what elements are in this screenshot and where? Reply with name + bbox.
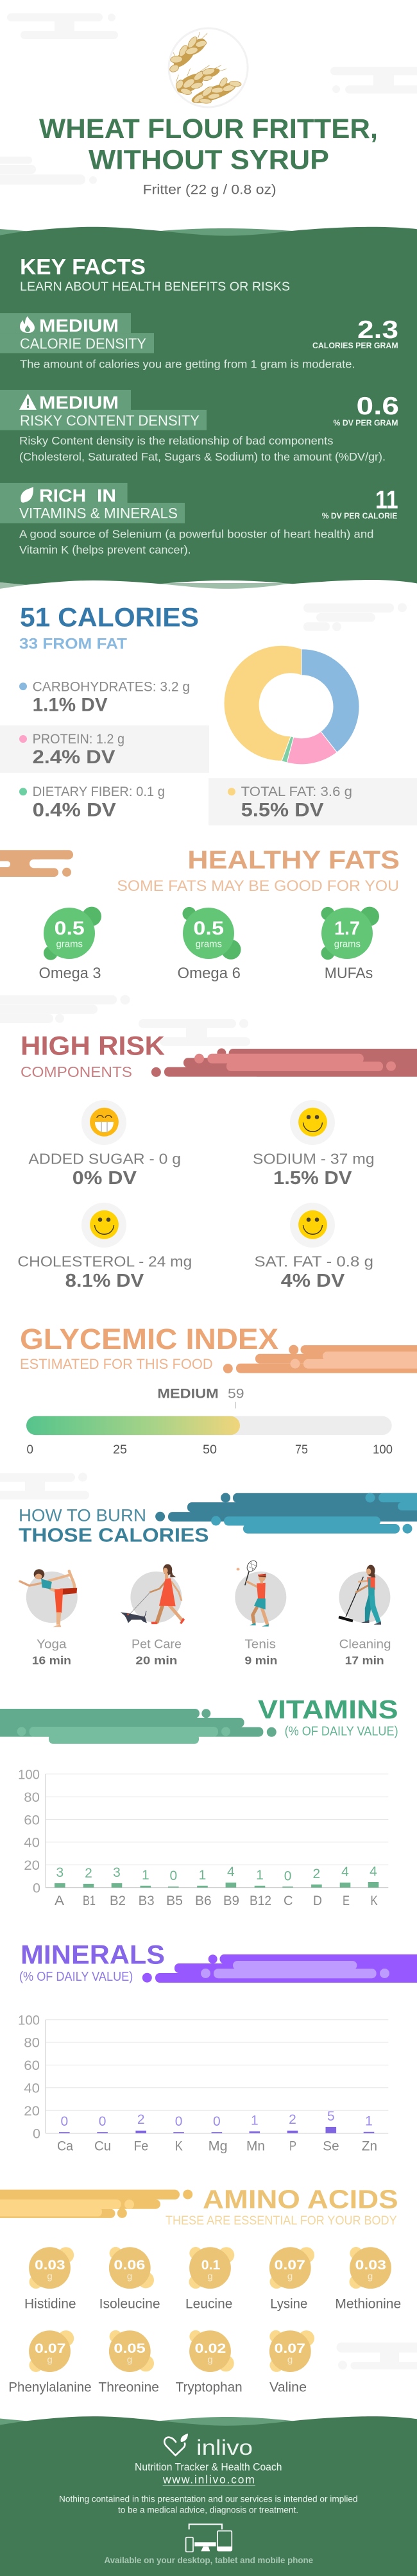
tagline: Nutrition Tracker & Health Coach (135, 2461, 282, 2473)
bar chart: minerals: Mn (246, 2139, 265, 2154)
icon: leaf (21, 487, 33, 503)
fact: vitamins and minerals: A good source of Selenium (a powerful booster of heart health) and (19, 528, 373, 541)
bar chart: minerals: 60 (24, 2058, 40, 2073)
subheading: (% OF DAILY VALUE) (285, 1725, 398, 1739)
donut chart (224, 645, 359, 765)
logo: wordmark: inlivo (196, 2436, 253, 2459)
panel: healthy fats (0, 846, 400, 982)
fact: calorie density: CALORIE DENSITY (20, 335, 146, 352)
disclaimer: Nothing contained in this presentation and our services is intended or implied (59, 2495, 358, 2504)
heading: glycemic index: GLYCEMIC INDEX (20, 1323, 278, 1355)
bar chart: minerals: 20 (24, 2104, 40, 2119)
legend: carbohydrates: CARBOHYDRATES: 3.2 g (33, 679, 190, 694)
legend: protein: PROTEIN: 1.2 g (33, 731, 124, 747)
stat: mufas (321, 907, 379, 982)
fact: risky content density: (Cholesterol, Saturated Fat, Sugars & Sodium) to the amount (%DV/gr). (19, 450, 386, 463)
bar chart: vitamins: 0 (284, 1869, 291, 1883)
stat: omega 6 (177, 907, 241, 982)
bar chart: minerals: 100 (18, 2013, 40, 2028)
bar chart: minerals: 0 (33, 2126, 40, 2141)
icon: devices (186, 2524, 232, 2552)
stat: mufas: 1.7 (334, 918, 360, 939)
fact: vitamins and minerals: 11 (375, 486, 398, 514)
heading: HOW TO BURN (19, 1505, 146, 1525)
bar chart: vitamins: 1 (199, 1868, 206, 1883)
activity: tennis (235, 1559, 286, 1627)
title: WITHOUT SYRUP (89, 144, 329, 175)
amino acid blobs, row 1: 0.03 (35, 2257, 65, 2273)
website link: www.inlivo.com (162, 2473, 255, 2486)
panel: minerals (18, 1939, 417, 2154)
amino acid blobs, row 1: 0.03 (355, 2257, 386, 2273)
legend: total fat (228, 784, 352, 821)
bar chart: vitamins: 0 (33, 1881, 40, 1895)
subheading: from fat: 33 FROM FAT (19, 635, 127, 653)
item: added sugar: ADDED SUGAR - 0 g (28, 1151, 181, 1167)
bar chart: vitamins: 1 (142, 1868, 149, 1883)
bar chart: vitamins: 3 (113, 1865, 121, 1880)
activity labels: Pet Care (132, 1638, 182, 1652)
amino acid blobs, row 2: 0.07 (275, 2341, 305, 2356)
bar chart: vitamins: 0 (169, 1868, 177, 1883)
subheading: components: COMPONENTS (21, 1063, 132, 1080)
activity labels: Yoga (37, 1638, 67, 1652)
subheading: SOME FATS MAY BE GOOD FOR YOU (117, 877, 399, 895)
stat: mufas: grams (334, 939, 361, 949)
fact: calorie density: The amount of calories you are getting from 1 gram is moderate. (20, 357, 355, 370)
serving size: Fritter (22 g / 0.8 oz) (143, 182, 277, 197)
fact: risky content density: RISKY CONTENT DENSITY (20, 412, 200, 428)
disclaimer (59, 2495, 358, 2514)
bar chart: vitamins: B2 (110, 1893, 126, 1908)
activity labels: 17 min (345, 1654, 384, 1667)
fact: calorie density: MEDIUM (39, 316, 119, 335)
bar chart: vitamins: B5 (166, 1893, 183, 1908)
bar chart: minerals: 2 (289, 2112, 296, 2127)
decorative streak (0, 1709, 277, 1744)
stat: omega 6: grams (196, 939, 222, 949)
fact: vitamins and minerals: RICH IN (39, 486, 116, 505)
panel: how to burn (19, 1493, 417, 1667)
amino acid blobs, row 1: g (127, 2271, 132, 2282)
gauge label: MEDIUM (157, 1386, 219, 1401)
gauge scale: 0 (27, 1443, 33, 1457)
bar chart: vitamins: D (313, 1893, 322, 1908)
legend: carbohydrates (19, 679, 190, 715)
legend: total fat: 5.5% DV (241, 799, 324, 821)
activity labels: 9 min (244, 1654, 277, 1667)
bar chart: minerals: 1 (251, 2113, 259, 2128)
bar chart: minerals: 0 (60, 2114, 68, 2129)
bar chart: minerals: 0 (213, 2114, 221, 2129)
icon: smiling face (90, 1210, 119, 1239)
panel: footer (0, 2416, 417, 2576)
stat: omega 6: Omega 6 (177, 965, 241, 982)
activity labels: 20 min (135, 1654, 177, 1667)
bar chart: minerals: 80 (24, 2036, 40, 2051)
item: cholesterol: 8.1% DV (65, 1271, 144, 1291)
item: sodium: SODIUM - 37 mg (253, 1151, 375, 1167)
amino acid blobs, row 1: Leucine (185, 2296, 232, 2312)
bar chart: vitamins: 100 (18, 1768, 40, 1782)
bar chart: vitamins: 4 (370, 1864, 377, 1879)
panel: calories (0, 602, 417, 826)
gauge bar (26, 1416, 392, 1435)
fact: calorie density (0, 313, 398, 370)
item: cholesterol: CHOLESTEROL - 24 mg (17, 1253, 192, 1270)
amino acid blobs, row 1: 0.1 (201, 2257, 220, 2273)
amino acid blobs, row 1 (24, 2247, 401, 2312)
bar chart: minerals: 0 (175, 2114, 182, 2129)
heading: healthy fats: HEALTHY FATS (187, 846, 400, 874)
legend: dietary fiber: DIETARY FIBER: 0.1 g (33, 784, 165, 799)
gauge label (157, 1386, 244, 1409)
icon: grinning face (90, 1108, 119, 1137)
amino acid blobs, row 2: Tryptophan (176, 2380, 243, 2395)
bar chart: vitamins: 1 (256, 1868, 264, 1883)
activity labels: Cleaning (339, 1638, 391, 1652)
amino acid blobs, row 2: Valine (269, 2380, 307, 2395)
bar chart: minerals: 5 (327, 2109, 335, 2124)
fact: risky content density (0, 390, 399, 463)
bar chart: vitamins: B6 (195, 1893, 212, 1908)
heading: vitamins: VITAMINS (258, 1695, 398, 1724)
bar chart: minerals: Zn (362, 2139, 377, 2154)
bar chart: vitamins: B1 (83, 1893, 96, 1908)
item: saturated fat: SAT. FAT - 0.8 g (254, 1253, 373, 1270)
heading: THOSE CALORIES (19, 1524, 209, 1546)
bar chart: minerals: Se (323, 2139, 339, 2154)
availability note: Available on your desktop, tablet and mobile phone (104, 2555, 313, 2565)
bar chart: minerals: 1 (365, 2114, 373, 2128)
amino acid blobs, row 1: Isoleucine (99, 2296, 160, 2312)
icon: wheat photo (169, 28, 248, 107)
amino acid blobs, row 1: g (207, 2271, 213, 2282)
heading: high risk: HIGH RISK (21, 1030, 165, 1060)
bar chart: minerals (18, 2013, 388, 2154)
bar chart: vitamins: 40 (24, 1836, 40, 1851)
logo: heart and leaf (164, 2434, 188, 2455)
gauge scale: 50 (203, 1443, 217, 1457)
bar chart: vitamins: K (371, 1893, 378, 1908)
amino acid blobs, row 2: 0.02 (195, 2341, 226, 2356)
bar chart: minerals: 2 (137, 2112, 145, 2127)
bar chart: vitamins: C (284, 1893, 293, 1908)
fact: vitamins and minerals: VITAMINS & MINERALS (19, 505, 178, 521)
amino acid blobs, row 1: Methionine (335, 2296, 401, 2312)
title (39, 114, 378, 175)
amino acid blobs, row 1: Lysine (270, 2296, 307, 2312)
icon: flame (20, 316, 35, 333)
amino acid blobs, row 2: g (127, 2354, 132, 2365)
panel: glycemic index (20, 1323, 417, 1457)
amino acid blobs, row 2: Threonine (98, 2380, 159, 2395)
decorative streak (155, 1493, 417, 1534)
bar chart: minerals: 40 (24, 2081, 40, 2096)
bar chart: vitamins: 2 (313, 1867, 320, 1881)
amino acid blobs, row 1: Histidine (24, 2296, 76, 2312)
amino acid blobs, row 2: 0.07 (35, 2341, 66, 2356)
fact: risky content density: MEDIUM (39, 393, 119, 412)
bar chart: minerals: K (175, 2139, 183, 2154)
icon: smiling face (298, 1108, 327, 1137)
decorative streak (0, 850, 73, 877)
item: added sugar (28, 1100, 181, 1189)
stat: omega 3 (38, 907, 101, 982)
activity: pet care (121, 1564, 185, 1624)
bar chart: vitamins: 4 (227, 1865, 235, 1879)
heading: minerals: MINERALS (21, 1939, 165, 1969)
activity labels: 16 min (32, 1654, 71, 1667)
activity labels (32, 1638, 391, 1667)
heading: key facts: KEY FACTS (20, 255, 146, 279)
fact: vitamins and minerals: Vitamin K (helps prevent cancer). (19, 543, 191, 556)
bar chart: minerals: Fe (133, 2139, 148, 2154)
bar chart: minerals: P (289, 2139, 296, 2154)
bar chart: vitamins: 3 (56, 1865, 64, 1880)
activity: cleaning (338, 1565, 390, 1625)
bar chart: vitamins (18, 1768, 388, 1908)
fact: calorie density: CALORIES PER GRAM (312, 341, 398, 350)
amino acid blobs, row 2 (8, 2330, 314, 2395)
stat: mufas: MUFAs (325, 965, 373, 982)
bar chart: vitamins: B3 (139, 1893, 155, 1908)
bar chart: vitamins: E (343, 1893, 350, 1908)
stat: omega 6: 0.5 (193, 918, 224, 939)
panel: high risk components (17, 1030, 417, 1291)
stat: omega 3: grams (56, 939, 83, 949)
amino acid blobs, row 2: Phenylalanine (8, 2380, 92, 2395)
activity: yoga (20, 1569, 78, 1627)
gauge scale (27, 1443, 393, 1457)
amino acid blobs, row 2: g (47, 2354, 53, 2365)
gauge scale: 75 (295, 1443, 308, 1457)
amino acid blobs, row 1: g (287, 2271, 293, 2282)
item: sodium: 1.5% DV (273, 1168, 352, 1189)
fact: risky content density: Risky Content density is the relationship of bad components (19, 434, 334, 447)
heading: calories: 51 CALORIES (20, 602, 199, 632)
heading: amino acids: AMINO ACIDS (203, 2184, 398, 2214)
bar chart: vitamins: 60 (24, 1813, 40, 1827)
panel: amino acids (0, 2184, 401, 2395)
bar chart: minerals: Ca (57, 2139, 73, 2154)
subheading: ESTIMATED FOR THIS FOOD (20, 1356, 213, 1372)
gauge scale: 100 (373, 1443, 393, 1457)
amino acid blobs, row 2: g (287, 2354, 293, 2365)
bar chart: minerals: Cu (94, 2139, 111, 2154)
panel: key facts (0, 227, 417, 589)
bar chart: vitamins: 4 (341, 1865, 349, 1879)
decorative streak (151, 1048, 417, 1077)
heading (19, 1505, 209, 1546)
fact: risky content density: 0.6 (357, 393, 399, 420)
bar chart: minerals: 0 (99, 2114, 106, 2129)
legend: dietary fiber: 0.4% DV (33, 799, 116, 821)
decorative streak (142, 1954, 417, 1983)
icon: warning triangle (19, 394, 37, 410)
amino acid blobs, row 1: 0.07 (275, 2257, 305, 2273)
bar chart: vitamins: 80 (24, 1790, 40, 1805)
legend: dietary fiber (19, 784, 165, 821)
fact: vitamins and minerals: % DV PER CALORIE (322, 511, 398, 520)
item: cholesterol (17, 1203, 192, 1291)
gauge scale: 25 (113, 1443, 127, 1457)
fact: calorie density: 2.3 (357, 316, 398, 344)
item: saturated fat (254, 1203, 373, 1291)
bar chart: vitamins: B9 (223, 1893, 239, 1908)
header (39, 28, 378, 197)
disclaimer: to be a medical advice, diagnosis or treatment. (118, 2505, 298, 2514)
amino acid blobs, row 1: g (47, 2271, 53, 2282)
decorative streak (0, 2190, 192, 2218)
fact: vitamins and minerals (0, 483, 398, 556)
legend: protein: 2.4% DV (33, 747, 115, 768)
bar chart: vitamins: B12 (250, 1893, 271, 1908)
item: saturated fat: 4% DV (281, 1271, 345, 1291)
panel: vitamins (0, 1695, 398, 1908)
subheading: (% OF DAILY VALUE) (19, 1970, 133, 1984)
amino acid blobs, row 1: g (368, 2271, 373, 2282)
amino acid blobs, row 2: g (207, 2354, 213, 2365)
decorative streak (223, 1345, 417, 1373)
item: sodium (253, 1100, 375, 1189)
legend: carbohydrates: 1.1% DV (33, 694, 108, 715)
fact: risky content density: % DV PER GRAM (334, 418, 398, 427)
amino acid blobs, row 1: 0.06 (114, 2257, 145, 2273)
subheading: LEARN ABOUT HEALTH BENEFITS OR RISKS (20, 280, 290, 294)
title: WHEAT FLOUR FRITTER, (39, 114, 378, 144)
icon: smiling face (298, 1210, 327, 1239)
bar chart: vitamins: A (55, 1893, 65, 1908)
subheading: THESE ARE ESSENTIAL FOR YOUR BODY (166, 2214, 397, 2228)
legend: total fat: TOTAL FAT: 3.6 g (241, 784, 352, 799)
bar chart: vitamins: 2 (85, 1866, 92, 1881)
bar chart: vitamins: 20 (24, 1858, 40, 1873)
bar chart: minerals: Mg (208, 2139, 228, 2154)
stat: omega 3: 0.5 (55, 918, 85, 939)
legend: protein (19, 731, 124, 768)
stat: omega 3: Omega 3 (38, 965, 101, 982)
amino acid blobs, row 2: 0.05 (114, 2341, 146, 2356)
activity labels: Tenis (244, 1638, 276, 1652)
item: added sugar: 0% DV (72, 1168, 137, 1189)
gauge label: 59 (228, 1386, 244, 1401)
